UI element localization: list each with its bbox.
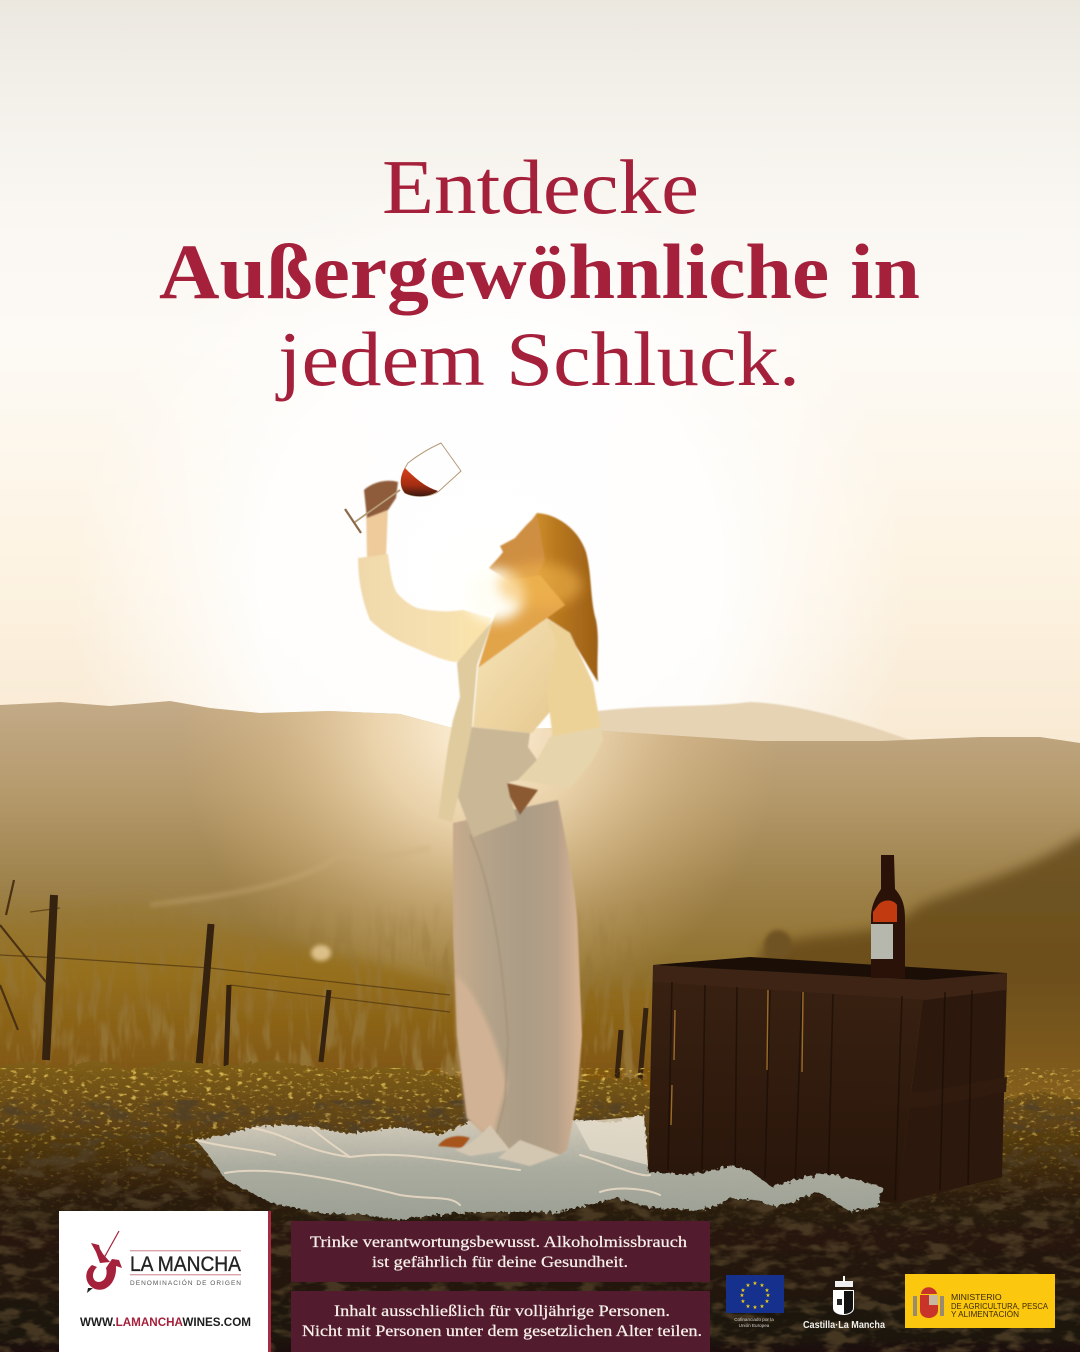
website url: WWW.LAMANCHAWINES.COM [80,1317,251,1329]
distant tree [764,930,792,960]
crate left face [648,965,925,1203]
distant hazy hill [590,702,910,760]
warning box 1 [291,1221,710,1282]
shoes [455,1125,560,1166]
crate right face [897,973,1007,1203]
bush twigs [0,926,652,1080]
cuff [518,727,603,788]
draped skirt [458,727,537,837]
logo subtitle: DENOMINACIÓN DE ORIGEN [130,1278,241,1287]
blanket [196,1115,882,1220]
fence wires [0,908,450,1012]
mountains [0,701,1080,1120]
wine glass [345,443,461,533]
heading line 2: Außergewöhnliche in [159,228,920,315]
heading line 3: jedem Schluck. [275,316,800,402]
raised forearm [366,506,388,558]
hand in pocket [507,783,538,815]
blanket folds [196,1127,660,1205]
stem and foot [355,490,400,522]
EU stars: ★ [741,1287,746,1294]
bottle red glow [873,900,897,922]
crate slat gaps [668,982,972,1200]
Castilla-La Mancha logo [803,1276,885,1331]
Spanish ministry logo [905,1274,1055,1328]
logo rule [130,1274,241,1275]
logo name: LA MANCHA [130,1253,241,1276]
ministry name: DE AGRICULTURA, PESCA [951,1301,1048,1311]
raised sleeve [358,554,492,662]
fence posts [46,895,646,1080]
face [489,516,545,590]
EU stars: ★ [746,1303,751,1310]
woman [358,481,603,1166]
jacket panel [438,620,493,822]
crate rails [653,965,1007,1000]
EU stars: ★ [753,1304,758,1311]
region name: Castilla·La Mancha [803,1319,885,1331]
lens flare [311,945,331,961]
blanket cream area behind legs [575,1116,648,1165]
neck and chest [478,575,565,668]
warning box 2: Nicht mit Personen unter dem gesetzlichen Alter teilen. [302,1323,702,1340]
EU stars: ★ [741,1298,746,1305]
warning box 1: ist gefährlich für deine Gesundheit. [372,1254,628,1271]
crate light cracks [671,990,803,1125]
shield [833,1290,854,1315]
vineyard bushes [0,895,660,1095]
red wine [401,468,438,496]
dead vine branch [0,880,46,1030]
pants fold [470,835,508,1140]
crate inside [653,957,1007,982]
icon: knight on seahorse [86,1231,122,1293]
logo panel [59,1211,271,1352]
grass texture [0,1068,1080,1240]
sun glow [0,170,1080,1010]
warning box 2: Inhalt ausschließlich für volljährige Personen. [334,1303,670,1320]
haze around the figure [0,701,1080,1120]
ministry name [951,1292,1048,1319]
EU caption: Cofinanciado por la [734,1317,774,1322]
EU stars: ★ [760,1282,765,1289]
warm flare over hair [498,563,582,607]
pants light panel [456,975,507,1142]
warning box 1: Trinke verantwortungsbewusst. Alkoholmissbrauch [310,1234,687,1251]
ministry name: Y ALIMENTACIÓN [951,1309,1019,1319]
ministry name: MINISTERIO [951,1292,1002,1302]
shoulder sleeve [518,620,603,788]
bottle label [871,924,893,959]
warning box 2 [291,1291,710,1352]
valley mist line [150,848,430,905]
heading line 1: Entdecke [382,144,699,230]
sunburst [465,563,582,621]
EU stars: ★ [765,1298,770,1305]
sky [0,0,1080,760]
EU stars: ★ [746,1282,751,1289]
wide pants [453,800,582,1156]
coat of arms [913,1287,944,1318]
EU stars: ★ [740,1292,745,1299]
EU stars: ★ [765,1287,770,1294]
dark forest slope at right [760,836,1080,1130]
hair [512,513,598,682]
bodice [473,618,570,733]
hand [364,481,398,518]
EU flag logo [726,1275,784,1328]
EU stars: ★ [760,1303,765,1310]
heading [159,144,920,402]
wine bottle [871,855,905,978]
EU stars [740,1280,771,1311]
EU stars: ★ [766,1292,771,1299]
glass bowl [401,443,461,496]
panel accent edge [268,1211,271,1352]
EU stars: ★ [753,1280,758,1287]
ground [0,1060,1080,1352]
sandal [438,1136,470,1148]
logo rule [130,1250,241,1251]
EU flag logo: Unión Europea [739,1323,770,1328]
dark grass patches [0,1100,1080,1352]
crate [648,957,1007,1203]
crown [835,1281,853,1287]
